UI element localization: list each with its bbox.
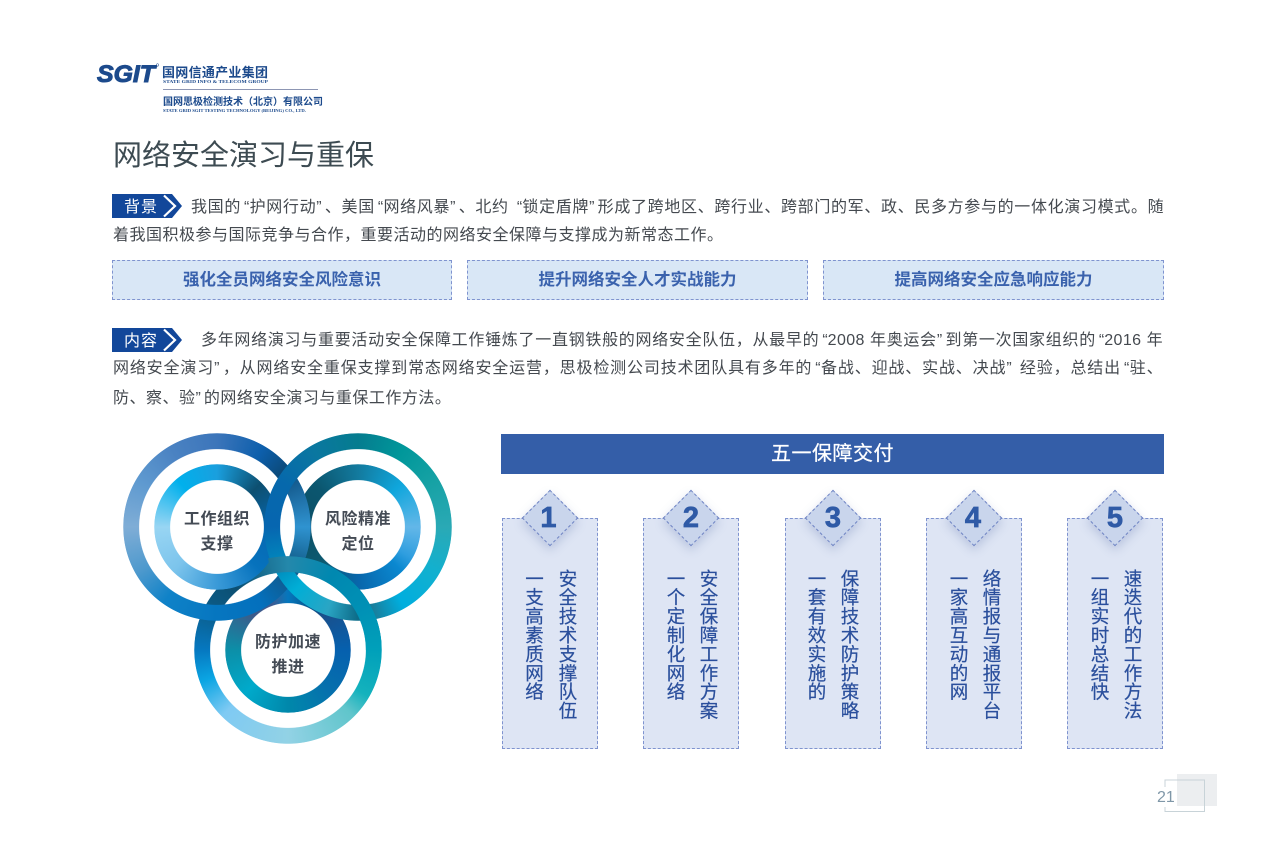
circle label: protection: 防护加速 [255, 634, 321, 651]
title: 网络安全演习与重保 [113, 140, 374, 172]
goal boxes: 强化全员网络安全风险意识 [183, 271, 381, 289]
goal boxes [112, 260, 1164, 300]
background paragraph [113, 198, 1164, 244]
card 2 [643, 490, 739, 749]
background paragraph: 我国的“护网行动”、美国“网络风暴”、北约 “锁定盾牌”形成了跨地区、跨行业、跨部门的军、政、民多方参与的一体化演习模式。随 [191, 199, 1164, 216]
tag: content [112, 328, 182, 352]
card 5: 一组实时总结快 [1089, 569, 1110, 701]
card 2: 2 [683, 502, 699, 534]
circle label: work organisation [184, 510, 250, 553]
logo: 国网信通产业集团 [162, 65, 268, 80]
logo: STATE GRID INFO & TELECOM GROUP [163, 79, 268, 84]
card 4 [926, 490, 1022, 749]
background paragraph: 着我国积极参与国际竞争与合作，重要活动的网络安全保障与支撑成为新常态工作。 [113, 227, 724, 244]
card 2: 安全保障工作方案 [698, 569, 719, 720]
tag: content: 内容 [124, 332, 158, 350]
goal boxes: 提升网络安全人才实战能力 [538, 271, 736, 289]
card 1: 安全技术支撑队伍 [557, 569, 578, 720]
card 3: 保障技术防护策略 [839, 569, 860, 720]
card 5: 速迭代的工作方法 [1122, 569, 1143, 720]
content paragraph: 防、察、验”的网络安全演习与重保工作方法。 [113, 390, 451, 407]
content paragraph [113, 331, 1163, 407]
content paragraph: 多年网络演习与重要活动安全保障工作锤炼了一直钢铁般的网络安全队伍，从最早的“2008 年奥运会”到第一次国家组织的“2016 年 [201, 332, 1163, 349]
goal boxes: 提高网络安全应急响应能力 [894, 271, 1092, 289]
card 2: 一个定制化网络 [665, 569, 686, 701]
card 4: 络情报与通报平台 [981, 569, 1002, 720]
circle label: protection [255, 633, 321, 676]
circle label: risk positioning [325, 510, 391, 553]
card 3: 3 [825, 502, 841, 534]
interlocking rings diagram [123, 433, 452, 744]
logo: STATE GRID SGIT TESTING TECHNOLOGY (BEIJING) CO., LTD. [163, 108, 306, 113]
card 4: 一家高互动的网 [948, 569, 969, 701]
page number: 21 [1157, 789, 1175, 806]
card 1 [502, 490, 598, 749]
logo: SGIT [97, 61, 157, 88]
card 5 [1067, 490, 1163, 749]
card 3: 一套有效实施的 [806, 569, 827, 701]
logo: 国网思极检测技术（北京）有限公司 [163, 95, 323, 108]
card 4: 4 [965, 502, 981, 534]
circle label: work organisation: 工作组织 [184, 511, 250, 528]
tag: background: 背景 [124, 198, 158, 216]
circle label: risk positioning: 定位 [341, 536, 374, 553]
circle label: risk positioning: 风险精准 [325, 511, 391, 528]
card 1: 1 [540, 502, 557, 534]
page number [1157, 774, 1217, 812]
circle label: work organisation: 支撑 [200, 536, 234, 553]
card 3 [785, 490, 881, 749]
circle label: protection: 推进 [271, 659, 304, 676]
tag: background [112, 194, 182, 218]
card 1: 一支高素质网络 [524, 569, 544, 701]
banner heading: 五一保障交付 [771, 443, 894, 465]
logo [96, 61, 323, 113]
banner heading [501, 434, 1164, 474]
card 5: 5 [1107, 502, 1123, 534]
